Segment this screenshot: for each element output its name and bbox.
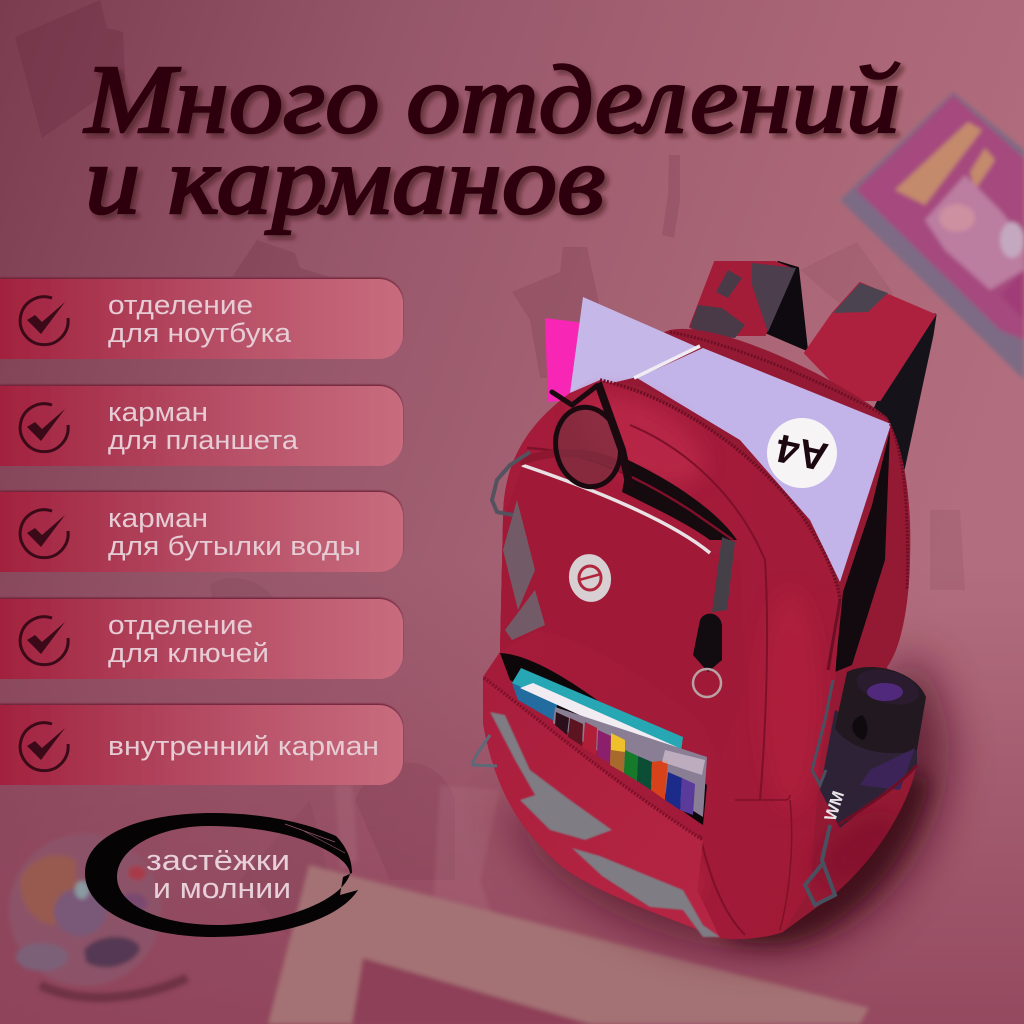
feature: inner pocket: внутренний карман	[108, 731, 379, 761]
feature: key compartment	[0, 599, 403, 679]
feature: bottle pocket	[0, 492, 403, 572]
feature: key compartment: отделение	[108, 610, 253, 640]
left side loop	[473, 735, 497, 766]
lower pocket flap edge and zipper	[484, 678, 703, 840]
callout: fasteners and zippers: застёжки	[146, 845, 290, 877]
front shell	[483, 380, 840, 939]
feature: inner pocket	[0, 705, 403, 785]
near strap	[805, 283, 935, 470]
water bottle: WM	[821, 789, 848, 823]
lower pocket reflective pattern	[490, 712, 720, 937]
background: lighter figure	[335, 785, 600, 1024]
title: Много отделений	[83, 46, 900, 154]
pocket contents	[512, 668, 707, 817]
shell seams and zippers	[600, 332, 907, 935]
title	[83, 46, 900, 235]
far strap	[690, 262, 807, 350]
lavender folder with A4 label	[634, 346, 891, 582]
callout: fasteners and zippers	[85, 813, 358, 937]
pink folder	[545, 318, 790, 402]
side zipper and pull	[805, 680, 917, 905]
feature: laptop compartment: отделение	[108, 290, 253, 320]
background: schoolbook top right	[840, 92, 1024, 380]
lavender sheet back	[570, 297, 697, 393]
shell highlights	[526, 375, 918, 919]
ground shadow	[500, 659, 950, 951]
feature: laptop compartment	[0, 279, 403, 359]
teal notebook	[512, 668, 683, 760]
bag body	[483, 329, 917, 939]
feature: tablet pocket: карман	[108, 397, 208, 427]
feature: tablet pocket: для планшета	[108, 425, 299, 455]
background: ruler and slate	[268, 865, 869, 1024]
left zip pull	[492, 452, 530, 515]
brand badge	[565, 551, 615, 605]
water bottle	[820, 663, 926, 828]
feature: bottle pocket: карман	[108, 503, 208, 533]
zipper pull and ring	[693, 537, 735, 697]
feature: laptop compartment: для ноутбука	[108, 318, 292, 348]
callout: fasteners and zippers: и молнии	[153, 873, 291, 905]
panel: feature list	[0, 279, 403, 785]
upper pocket reflective pattern	[503, 500, 545, 640]
title: и карманов	[85, 127, 605, 235]
brush ring	[85, 813, 358, 937]
background: globe	[9, 834, 187, 998]
feature: key compartment: для ключей	[108, 638, 269, 668]
lavender folder with A4 label: A4	[772, 425, 832, 479]
inside dark opening	[835, 430, 890, 672]
lower pocket opening	[500, 653, 707, 825]
feature: bottle pocket: для бутылки воды	[108, 531, 361, 561]
pencil box with markers	[553, 707, 707, 817]
upper pocket	[500, 448, 745, 760]
backpack illustration	[473, 262, 950, 951]
glasses	[548, 383, 630, 493]
feature: tablet pocket	[0, 386, 403, 466]
lower pocket body	[483, 678, 720, 938]
